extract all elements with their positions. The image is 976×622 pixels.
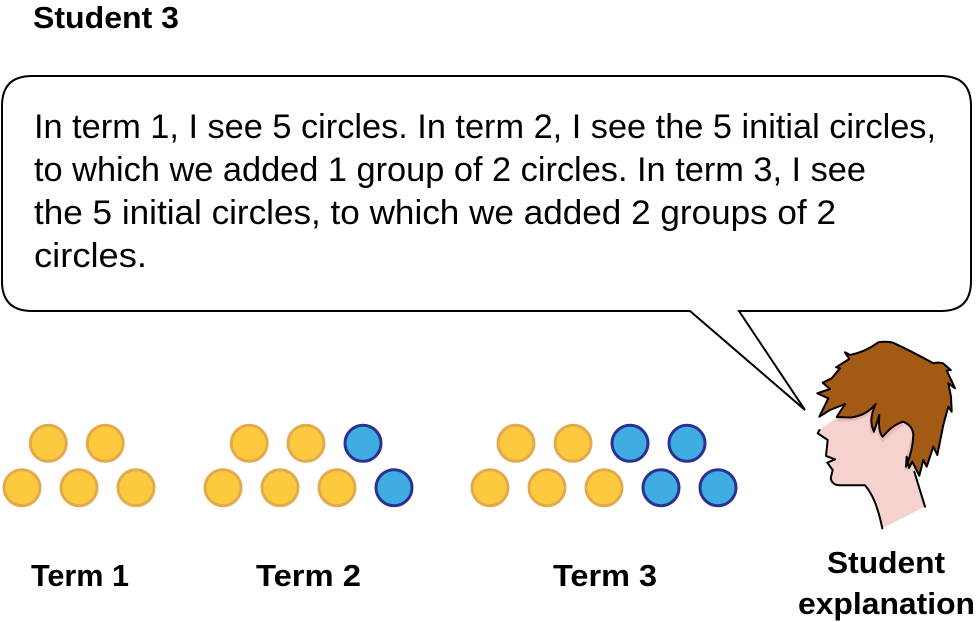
term 2 circles <box>205 425 412 506</box>
student explanation label: Student <box>827 545 945 580</box>
speech bubble <box>2 76 971 410</box>
student explanation label: explanation <box>798 586 975 621</box>
term 2 label: Term 2 <box>256 558 361 593</box>
title: Student 3 <box>33 0 179 35</box>
bubble text: In term 1, I see 5 circles. In term 2, I see the 5 initial circles, <box>34 108 936 146</box>
term 3 label: Term 3 <box>553 558 657 593</box>
term 1 label: Term 1 <box>31 558 129 593</box>
term 1 circles <box>4 425 154 506</box>
student head icon <box>817 342 955 528</box>
bubble text: circles. <box>34 237 147 275</box>
student explanation label <box>798 545 975 621</box>
term 3 circles <box>472 425 736 506</box>
bubble text: the 5 initial circles, to which we added 2 groups of 2 <box>34 194 836 232</box>
bubble text: to which we added 1 group of 2 circles. In term 3, I see <box>34 151 866 189</box>
